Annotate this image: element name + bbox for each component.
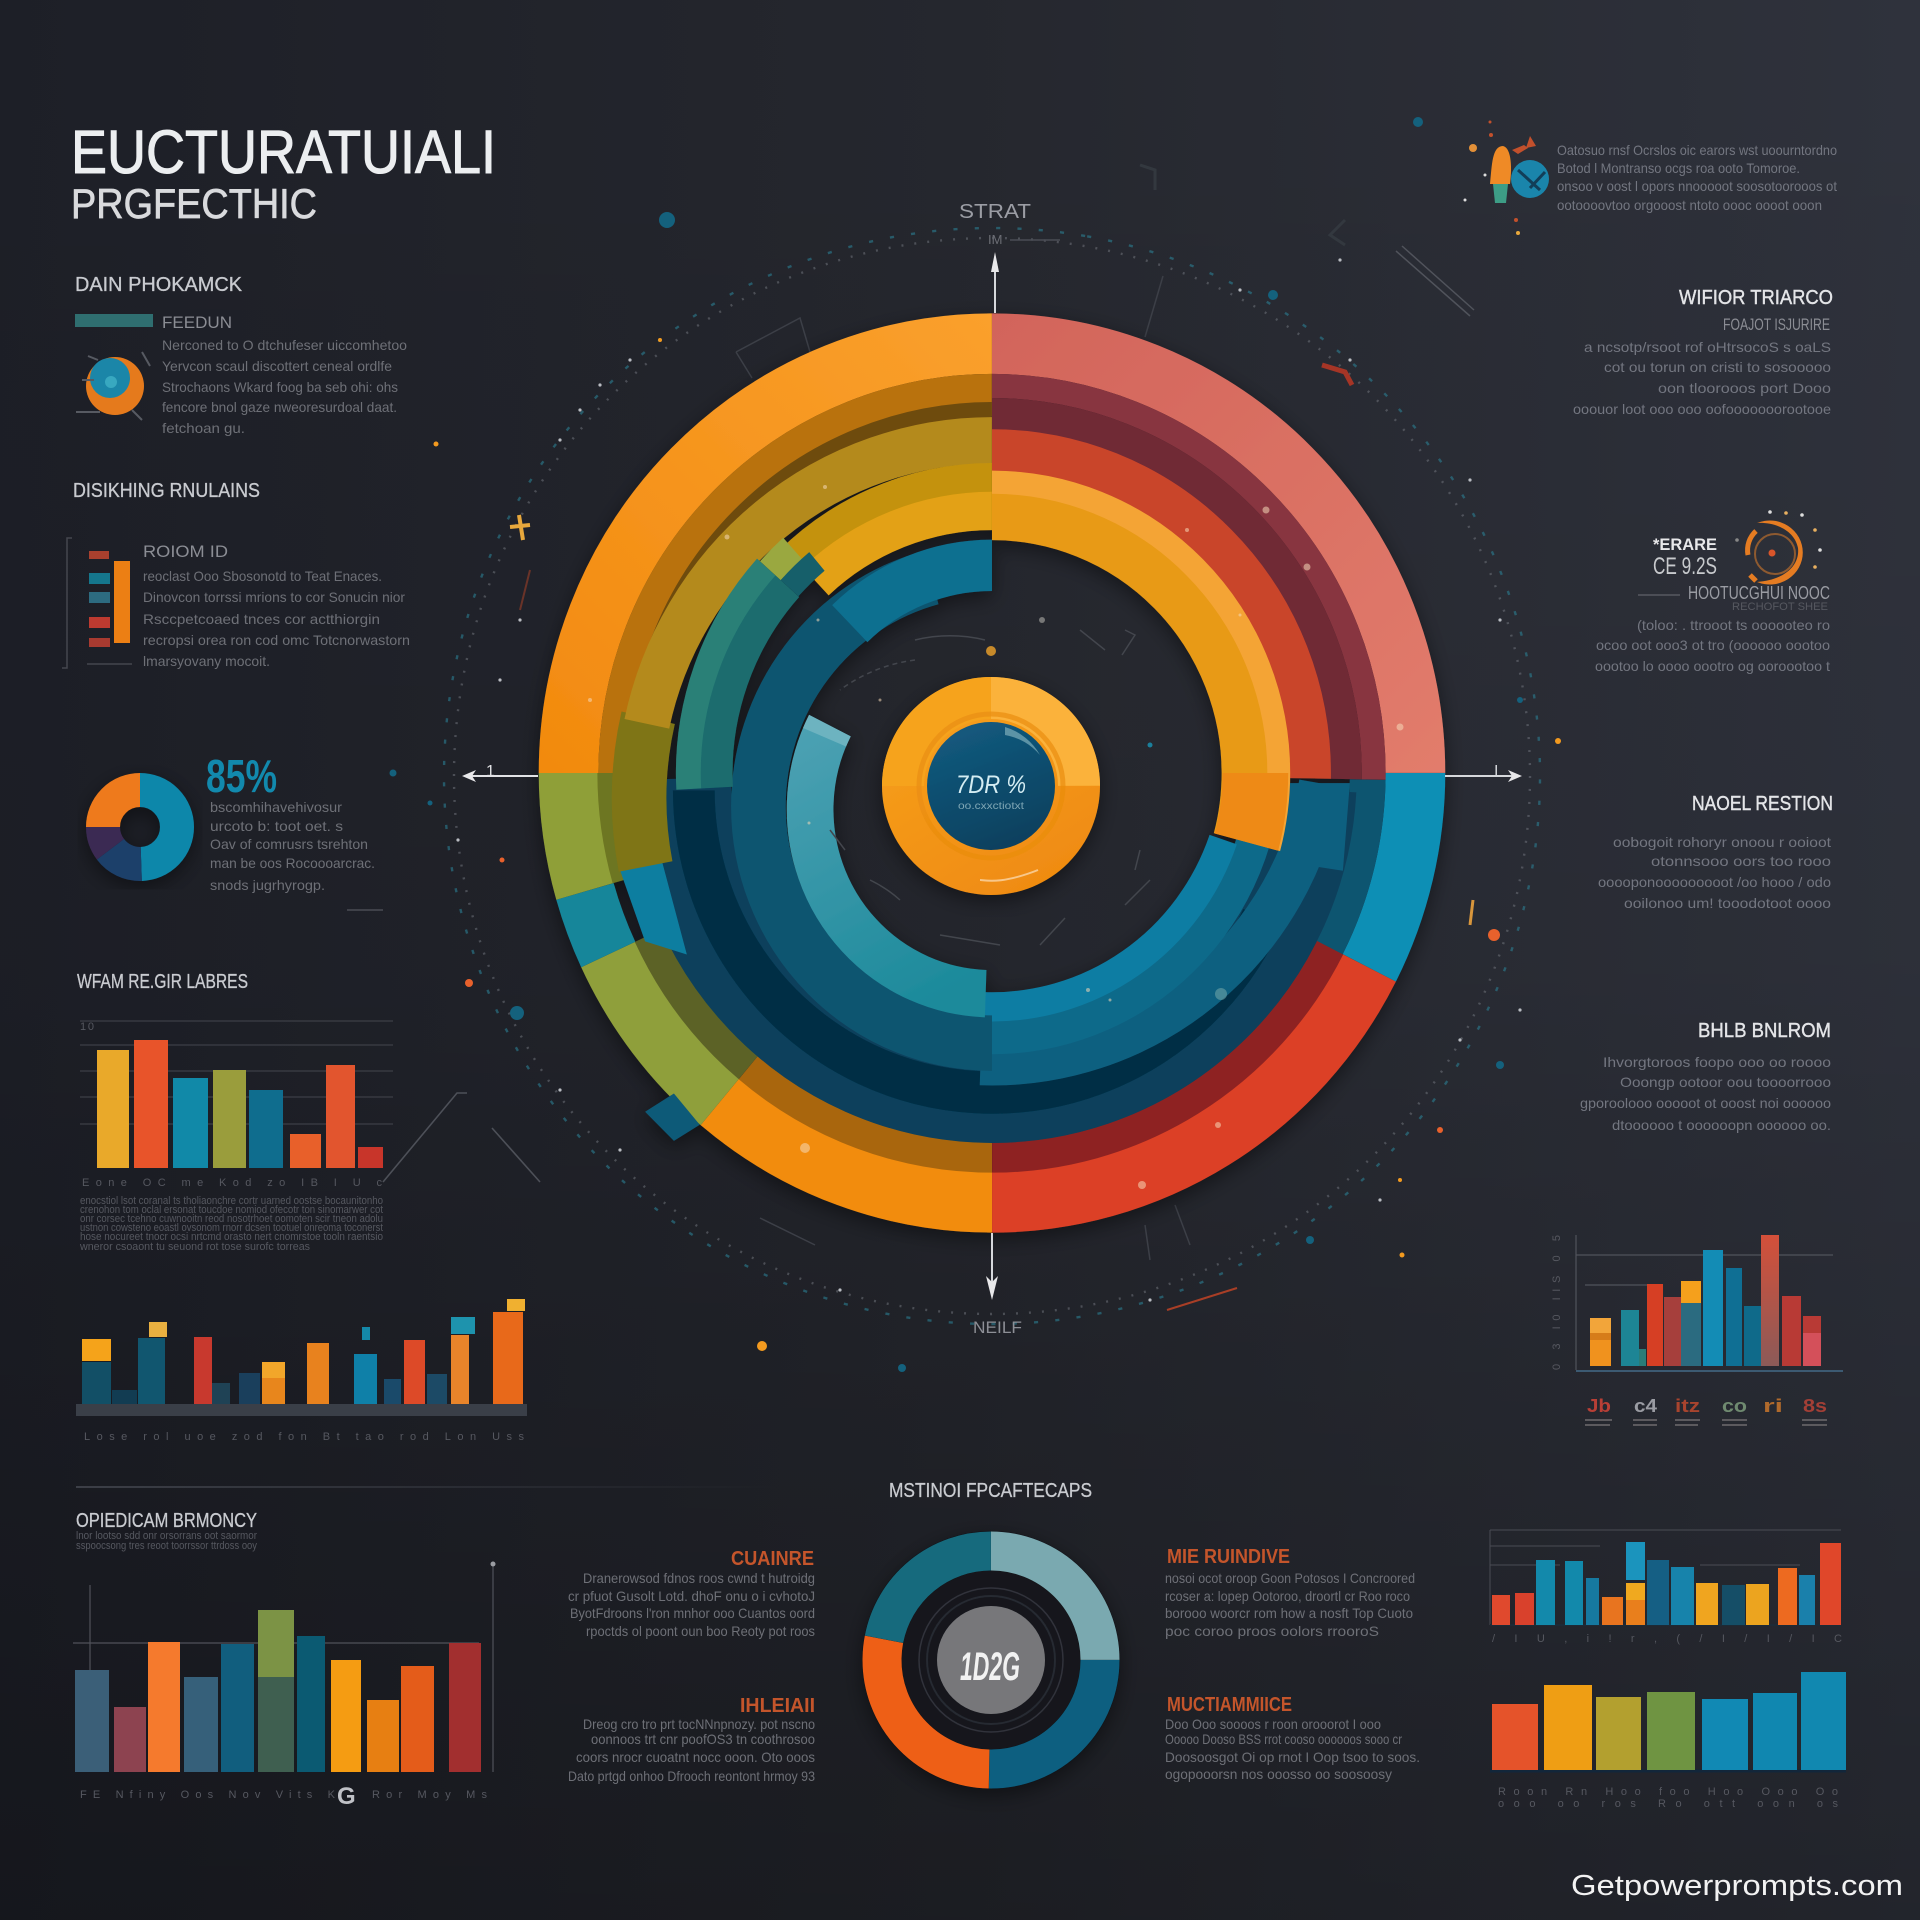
bar chart: right side: 0 3 I0 IIS 0 5 <box>1551 1235 1563 1370</box>
text block: left of bottom donut: Dato prtgd onhoo Dfrooch reontont hrmoy 93 <box>568 1768 815 1784</box>
icons: chart categories: co <box>1722 1396 1747 1416</box>
title <box>71 118 496 227</box>
panel: gauge note: HOOTUCGHUI NOOC <box>1688 583 1830 603</box>
text block: left of bottom donut: IHLEIAII <box>740 1695 815 1717</box>
bar chart: bottom right upper: / I U , i ! r , ( / I / I / I C <box>1492 1633 1842 1645</box>
text block: chart notes: hose nocureet tnocr ocsi nrtcmd orasto nert cnomrstoe tooln raentsio <box>80 1231 383 1243</box>
panel: data programme: fetchoan gu. <box>162 420 245 436</box>
panel: discharge results: Rsccpetcoaed tnces cor actthiorgin <box>143 611 380 627</box>
bar chart: bottom right lower: ooo oo ros Ro ott oon os <box>1498 1798 1838 1810</box>
arrow: bottom: NEILF <box>973 1318 1022 1337</box>
bar chart: FE Nfiny Oos Nov Vits K <box>80 1789 336 1801</box>
panel: gauge note: (toloo: . ttrooot ts oooooteo ro <box>1637 617 1830 633</box>
panel: top right note <box>1464 120 1837 235</box>
panel: discharge results: DISIKHING RNULAINS <box>73 480 260 502</box>
icons: chart categories: itz <box>1675 1396 1700 1416</box>
text block: right of bottom donut: MUCTIAMMIICE <box>1167 1694 1292 1716</box>
panel: top right note: onsoo v oost l opors nnooooot soosotoorooos ot <box>1557 178 1837 194</box>
bar chart: bottom right upper <box>1490 1530 1842 1645</box>
panel: discharge results: recropsi orea ron cod omc Totcnorwastorn <box>143 632 410 648</box>
panel: naoel restion: ooooponooooooooot /oo hooo / odo <box>1598 874 1831 890</box>
icons: chart categories <box>1585 1396 1827 1425</box>
arrow: top <box>959 201 1060 313</box>
panel: wifior trianco: cot ou torun on cristi to sosooooo <box>1604 359 1831 375</box>
text block: left of bottom donut: cr pfuot Gusolt Lotd. dhoF onu o i cvhotoJ <box>568 1588 815 1604</box>
text block: left of bottom donut: oonnoos trt cnr poofOS3 tn coothrosoo <box>591 1731 815 1747</box>
bar chart: right side <box>1551 1235 1843 1425</box>
panel: gauge note: RECHOFOT SHEE <box>1732 601 1828 613</box>
block: teal chunk <box>620 858 687 954</box>
ring: second band <box>458 232 1526 1314</box>
text block: right of bottom donut: borooo woorcr rom how a nosft Top Cuoto <box>1165 1605 1413 1621</box>
panel: naoel restion: oobogoit rohoryr onoou r ooioot <box>1613 834 1831 850</box>
watermark: Getpowerprompts.com <box>1571 1870 1903 1902</box>
panel: data programme: DAIN PHOKAMCK <box>75 274 243 296</box>
panel: bottom donut <box>862 1480 1120 1789</box>
icons: chart categories: ri <box>1763 1396 1783 1416</box>
panel: bar chart with labels <box>77 971 393 1253</box>
panel: discharge results: Dinovcon torrssi mrions to cor Sonucin nior <box>143 589 405 605</box>
stacked bar chart <box>76 1299 527 1443</box>
panel: bottom donut: MSTINOI FPCAFTECAPS <box>889 1480 1092 1502</box>
text block: right of bottom donut: poc coroo proos oolors rrooroS <box>1165 1623 1379 1639</box>
centre value <box>956 771 1026 812</box>
panel: top right note: ootoooovtoo orgooost ntoto oooc oooot ooon <box>1557 197 1822 213</box>
panel: top right note: Oatosuo rnsf Ocrslos oic earors wst uoourntordno <box>1557 142 1837 158</box>
text block: right of bottom donut <box>1165 1546 1420 1782</box>
panel: gauge note: ocoo oot ooo3 ot tro (oooooo oootoo <box>1596 637 1830 653</box>
panel: data programme: Nerconed to O dtchufeser uiccomhetoo <box>162 337 407 353</box>
text block: left of bottom donut <box>568 1548 815 1784</box>
panel: donut statistic: Oav of comrusrs tsrehton <box>210 836 368 852</box>
text block: chart notes: onr corsec tcehno cuwnooitn reod nosotrhoet oomoten scir tneon adolu <box>80 1213 383 1225</box>
panel: wifior trianco <box>1573 287 1833 417</box>
icons: chart categories: c4 <box>1634 1396 1657 1416</box>
panel: naoel restion: NAOEL RESTION <box>1692 793 1833 815</box>
chart: donut <box>88 775 192 879</box>
arrow: left <box>462 763 538 782</box>
panel: data programme <box>75 274 407 436</box>
panel: bhlb bnlrom: gporoolooo ooooot ot ooost noi oooooo <box>1580 1095 1831 1111</box>
bar chart: bottom right lower: Roon Rn Hoo foo Hoo Ooo Oo <box>1498 1786 1838 1798</box>
panel: discharge results: lmarsyovany mocoit. <box>143 653 270 669</box>
text block: left of bottom donut: ByotFdroons l'ron mnhor ooo Cuantos oord <box>570 1605 815 1621</box>
chart: donut: 1D2G <box>960 1645 1020 1689</box>
panel: wifior trianco: oon tloorooos port Dooo <box>1658 380 1831 396</box>
panel: donut statistic: snods jugrhyrogp. <box>210 877 325 893</box>
panel: data programme: Strochaons Wkard foog ba seb ohi: ohs <box>162 379 398 395</box>
panel: data programme: fencore bnol gaze nweoresurdoal daat. <box>162 399 397 415</box>
centre value: oo.cxxctiotxt <box>958 801 1024 812</box>
icon: orange gauge <box>1735 510 1822 584</box>
panel: wifior trianco: a ncsotp/rsoot rof oHtrsocoS s oaLS <box>1584 339 1831 355</box>
panel: gauge note: CE 9.2S <box>1653 553 1717 580</box>
icons: chart categories: 8s <box>1803 1396 1827 1416</box>
ring: orange bands right <box>706 483 1278 1063</box>
panel: wifior trianco: FOAJOT ISJURIRE <box>1723 315 1830 334</box>
panel: donut statistic: urcoto b: toot oet. s <box>210 818 343 834</box>
orbit rings and scattered particles <box>357 117 1627 1411</box>
arrow: right: I <box>1494 763 1498 780</box>
text block: chart notes: ustnon cowsteno eoastl ovsonom rnorr dcsen tootuel onreoma toconerst <box>80 1222 383 1234</box>
text block: right of bottom donut: MIE RUINDIVE <box>1167 1546 1290 1568</box>
divider <box>76 1486 780 1488</box>
panel: wifior trianco: WIFIOR TRIARCO <box>1679 287 1833 309</box>
panel: bhlb bnlrom: Ooongp ootoor oou toooorrooo <box>1620 1074 1831 1090</box>
panel: discharge results: reoclast Ooo Sbosonotd to Teat Enaces. <box>143 568 382 584</box>
bar chart: Eone OC me Kod zo IB I U c <box>82 1177 383 1189</box>
panel: bhlb bnlrom: dtoooooo t oooooopn oooooo oo. <box>1612 1117 1831 1133</box>
panel: top right note: Botod l Montranso ocgs roa ooto Tomoroe. <box>1557 160 1800 176</box>
ring: blue bands lower right <box>605 332 1379 1117</box>
text block: chart notes: enocstiol lsot coranal ts tholiaonchre cortr uarned oostse bocaunitonho <box>80 1195 383 1207</box>
bar chart: 10 <box>80 1021 94 1033</box>
icon: blue chip under ring <box>645 1094 700 1141</box>
panel: discharge results <box>62 480 410 669</box>
text block: left of bottom donut: CUAINRE <box>731 1548 814 1570</box>
arrow: top: IM <box>988 232 1002 247</box>
centre details <box>830 617 1152 945</box>
arrow: top: STRAT <box>959 201 1031 223</box>
text block: right of bottom donut: Doosoosgot Oi op rnot I Oop tsoo to soos. <box>1165 1749 1420 1765</box>
bar chart: bottom right lower <box>1490 1672 1846 1810</box>
text block: left of bottom donut: Dranerowsod fdnos roos cwnd t hutroidg <box>583 1570 815 1586</box>
panel: donut statistic: bscomhihavehivosur <box>210 799 342 815</box>
ring: gold bands upper left <box>573 356 1411 1223</box>
panel: bhlb bnlrom: Ihvorgtoroos foopo ooo oo roooo <box>1603 1054 1831 1070</box>
arrow: bottom <box>973 1233 1022 1337</box>
panel: optimum bar chart: OPIEDICAM BRMONCY <box>76 1510 257 1532</box>
panel: data programme: FEEDUN <box>162 313 232 332</box>
text block: chart notes <box>79 1195 383 1253</box>
title: EUCTURATUIALI <box>71 118 496 186</box>
text block: chart notes: crenohon tom oclal ersonat toucdoe nomiod ofecotr ton sinomarwer cot <box>80 1204 383 1216</box>
panel: donut statistic: man be oos Rocoooarcrac. <box>210 855 375 871</box>
title: PRGFECTHIC <box>71 180 317 227</box>
text block: right of bottom donut: ogopooorsn nos ooosso oo soosoosy <box>1165 1766 1392 1782</box>
text block: right of bottom donut: rcoser a: lopep Ootoroo, droortl cr Roo roco <box>1165 1588 1410 1604</box>
text block: left of bottom donut: coors nrocr cuoatnt nocc ooon. Oto ooos <box>576 1749 815 1765</box>
text block: right of bottom donut: nosoi ocot oroop Goon Potosos I Concroored <box>1165 1570 1415 1586</box>
icon: colour splash <box>1464 120 1549 235</box>
icon: small orange donut <box>75 314 153 420</box>
panel: gauge note: *ERARE <box>1653 535 1717 554</box>
text block: right of bottom donut: Doo Ooo soooos r roon orooorot I ooo <box>1165 1716 1381 1732</box>
arrow: right <box>1445 763 1522 782</box>
ring: outer band <box>395 168 1589 1378</box>
chart: donut <box>862 1531 1120 1789</box>
text block: chart notes: wneror csoaont tu seuond rot tose surofc torreas <box>79 1241 310 1253</box>
icon: bracket chart <box>62 538 132 668</box>
ring: teal green upper left <box>571 346 1413 1200</box>
bar chart <box>80 1021 393 1189</box>
panel: optimum bar chart <box>73 1510 496 1810</box>
main concentric circular chart <box>395 168 1589 1378</box>
centre value: 7DR % <box>956 771 1026 799</box>
panel: donut statistic <box>88 750 383 910</box>
panel: gauge note <box>1595 510 1830 674</box>
panel: donut statistic: 85% <box>206 750 277 802</box>
panel: discharge results: ROIOM ID <box>143 542 228 561</box>
panel: naoel restion <box>1598 793 1833 911</box>
bar chart: Ror Moy Ms <box>372 1789 488 1801</box>
panel: naoel restion: otonnsooo oors too rooo <box>1651 853 1831 869</box>
bar chart <box>73 1562 496 1810</box>
panel: bhlb bnlrom: BHLB BNLROM <box>1698 1020 1831 1042</box>
ring: dark teal spiral <box>702 479 1282 1067</box>
bar chart: G <box>337 1783 356 1810</box>
text block: left of bottom donut: Dreog cro tro prt tocNNnpnozy. pot nscno <box>583 1716 815 1732</box>
arrow: left: 1 <box>486 763 495 780</box>
speckles on rings <box>588 485 1404 1189</box>
panel: gauge note: oootoo lo oooo oootro og ooroootoo t <box>1595 658 1830 674</box>
icons: chart categories: Jb <box>1587 1396 1611 1416</box>
panel: data programme: Yervcon scaul discottert ceneal ordlfe <box>162 358 392 374</box>
panel: optimum bar chart: sspoocsong tres reoot toorrssor ttrdoss ooy <box>76 1540 257 1552</box>
stacked bar chart: Lose rol uoe zod fon Bt tao rod Lon Uss <box>84 1431 525 1443</box>
text block: left of bottom donut: rpoctds ol poont oun boo Reoty pot roos <box>586 1623 815 1639</box>
panel: naoel restion: ooilonoo um! tooodotoot oooo <box>1624 895 1831 911</box>
ring: navy base <box>596 388 1388 1192</box>
panel: optimum bar chart: lnor lootso sdd onr orsorrans oot saormor <box>76 1530 257 1542</box>
panel: bar chart with labels: WFAM RE.GIR LABRES <box>77 971 248 993</box>
panel: wifior trianco: ooouor loot ooo ooo oofooooooorootooe <box>1573 401 1831 417</box>
panel: bhlb bnlrom <box>1580 1020 1831 1133</box>
text block: right of bottom donut: Ooooo Dooso BSS rrot cooso oooooos sooo cr <box>1165 1731 1402 1747</box>
centre medallion <box>882 677 1100 895</box>
ring: light teal arc <box>753 567 1231 1051</box>
